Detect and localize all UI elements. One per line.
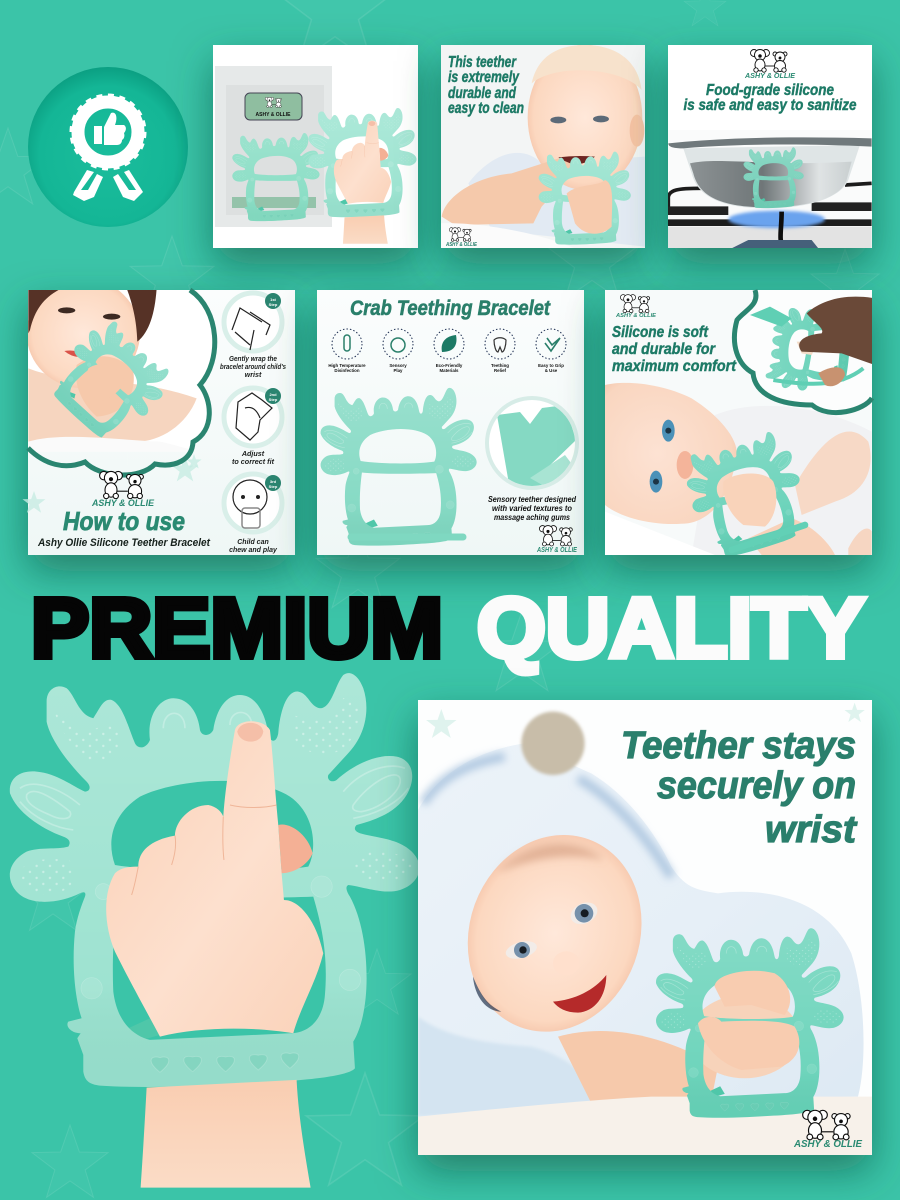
packaging bag: [215, 66, 332, 227]
logo: [615, 295, 656, 319]
headline: maximum comfort: [612, 358, 737, 375]
subheading: Ashy Ollie Silicone Teether Bracelet: [37, 537, 211, 549]
headline: and durable for: [612, 341, 716, 358]
caption: massage aching gums: [494, 512, 570, 522]
panel: soft and durable: [605, 290, 875, 563]
step 1: bracelet around child's: [220, 362, 286, 371]
headline: [612, 324, 737, 375]
step 1: Gently wrap the: [229, 354, 277, 363]
panel: how to use: [23, 278, 295, 555]
feature icons: [328, 329, 566, 373]
panel: food-grade silicone: [668, 45, 872, 248]
step 2: Adjust: [241, 449, 265, 458]
caption: Sensory teether designed: [488, 494, 577, 504]
step 3: Child can: [237, 539, 269, 546]
feature icons: Eco-Friendly: [436, 363, 463, 368]
step 3: chew and play: [229, 547, 278, 554]
feature icons: High Temperature: [328, 363, 366, 368]
headline: easy to clean: [448, 100, 524, 117]
logo: ASHY & OLLIE: [91, 498, 155, 509]
step 1: [220, 293, 286, 379]
baby photo: [605, 383, 872, 563]
headline: is extremely: [448, 69, 520, 86]
step 2: 2nd: [269, 392, 277, 397]
logo: ASHY & OLLIE: [615, 313, 656, 319]
packaging bag: ASHY & OLLIE: [256, 112, 291, 118]
logo: ASHY & OLLIE: [536, 547, 577, 554]
logo: ASHY & OLLIE: [744, 73, 795, 80]
step 2: to correct fit: [232, 457, 275, 466]
panel: crab teething bracelet: [317, 290, 584, 555]
step 1: 1st: [270, 297, 277, 302]
feature icons: Teething: [491, 363, 509, 368]
icon: quality award badge: [28, 67, 188, 227]
brand logo: [445, 228, 477, 248]
step 3: [224, 474, 282, 554]
headline: Silicone is soft: [612, 324, 709, 341]
headline: Teether stays: [621, 725, 856, 767]
photo: boiling pot on stove: [668, 130, 872, 248]
headline: [448, 54, 524, 117]
feature icons: Disinfection: [334, 368, 360, 373]
feature icons: Easy to Grip: [538, 363, 564, 368]
step 1: Step: [269, 302, 278, 307]
logo: [793, 1110, 862, 1150]
step 2: Step: [269, 397, 278, 402]
headline: Food-grade silicone: [706, 82, 834, 99]
feature icons: Relief: [494, 368, 507, 373]
heading: how to use: How to use: [63, 506, 185, 536]
logo: ASHY & OLLIE: [793, 1139, 862, 1150]
heading: premium quality: QUALITY: [477, 581, 865, 675]
texture detail circle: [487, 398, 580, 495]
feature icons: & Use: [545, 368, 558, 373]
cloud inset: hand holding teether: [728, 290, 875, 415]
headline: [621, 725, 857, 851]
baby photo: [440, 45, 645, 250]
heading: premium quality: PREMIUM: [31, 581, 443, 675]
pale stars: [23, 454, 202, 513]
caption: with varied textures to: [492, 503, 572, 513]
feature icons: Play: [393, 368, 403, 373]
panel: durable and easy to clean: [440, 45, 645, 250]
feature icons: Materials: [439, 368, 459, 373]
headline: [684, 82, 857, 114]
logo: [536, 526, 577, 554]
logo: [744, 50, 795, 80]
headline: wrist: [765, 809, 857, 851]
step 3: 3rd: [270, 479, 277, 484]
headline: securely on: [657, 765, 856, 807]
panel: teether stays on wrist: [418, 700, 872, 1155]
heading: premium quality: [31, 581, 865, 675]
teether in bag: [232, 133, 320, 221]
headline: durable and: [448, 85, 516, 102]
panel: product in packaging: [213, 45, 418, 248]
heading: Crab Teething Bracelet: [350, 297, 551, 320]
headline: This teether: [448, 54, 517, 71]
step 3: Step: [269, 484, 278, 489]
brand logo: ASHY & OLLIE: [445, 242, 477, 248]
large teether on child's hand: [10, 673, 419, 1188]
teether on hand: [308, 108, 417, 244]
feature icons: Sensory: [389, 363, 407, 368]
caption: [488, 494, 577, 522]
baby photo in cloud frame: [27, 278, 227, 475]
step 2: [224, 388, 282, 466]
baby in towel photo: [418, 703, 872, 1155]
teether product: [321, 388, 477, 546]
step 1: wrist: [245, 370, 262, 379]
headline: is safe and easy to sanitize: [684, 97, 857, 114]
logo: [91, 471, 155, 509]
